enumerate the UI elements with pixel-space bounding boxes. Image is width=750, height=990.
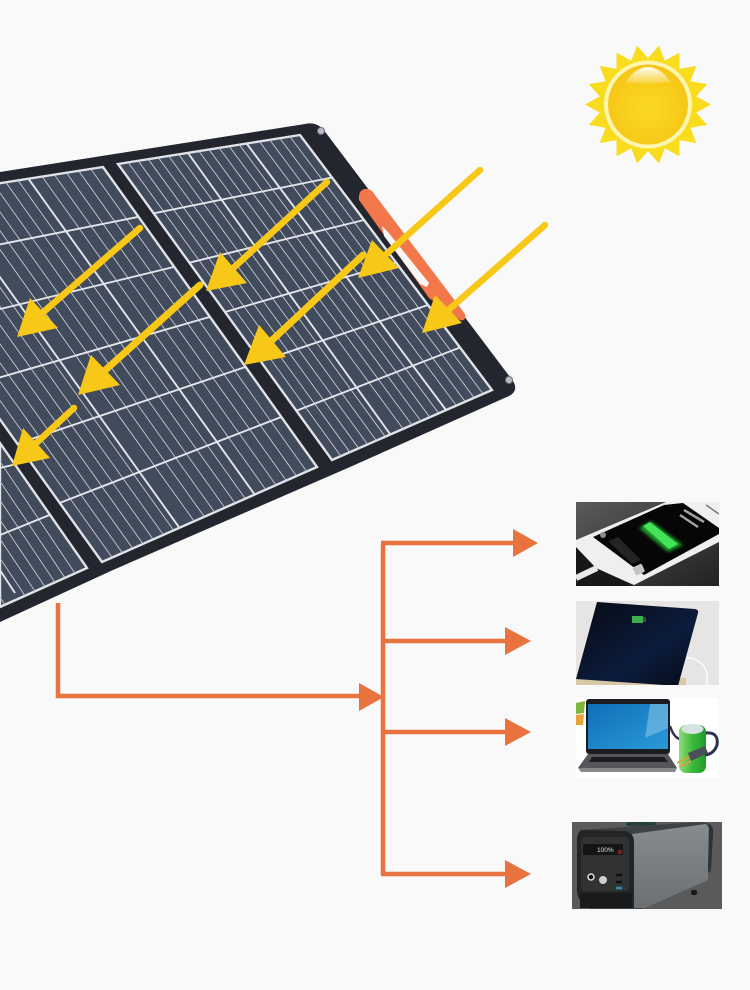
splitter trunk [381,545,385,875]
display reading: 100% [597,847,614,854]
arrow 4 [358,170,480,278]
connector from panel to splitter [58,603,384,711]
arrow 2 [206,182,327,291]
arrow to power station [381,860,531,888]
panel: middle solar section [0,167,317,562]
arrow to phone [381,529,538,557]
arrow 3 [78,285,200,395]
icon: sun [585,46,711,163]
corner rivets [318,128,512,384]
panel backing [0,123,515,622]
orange carry handle [359,189,465,320]
panel: left solar section [0,443,87,607]
panel: right solar section [118,135,492,460]
orange connector arrows [58,529,538,888]
device: portable power station [572,822,722,910]
arrow 1 [17,228,140,337]
solar panel [0,123,515,622]
arrow to tablet [381,627,531,655]
device: laptop with battery [576,698,719,778]
arrow to laptop [381,718,531,746]
arrow 7 [12,408,74,466]
sunlight arrows [12,170,545,466]
device: charging tablet [576,601,719,686]
arrow 5 [422,225,545,333]
device: charging phone [576,502,719,586]
arrow 6 [244,255,363,365]
